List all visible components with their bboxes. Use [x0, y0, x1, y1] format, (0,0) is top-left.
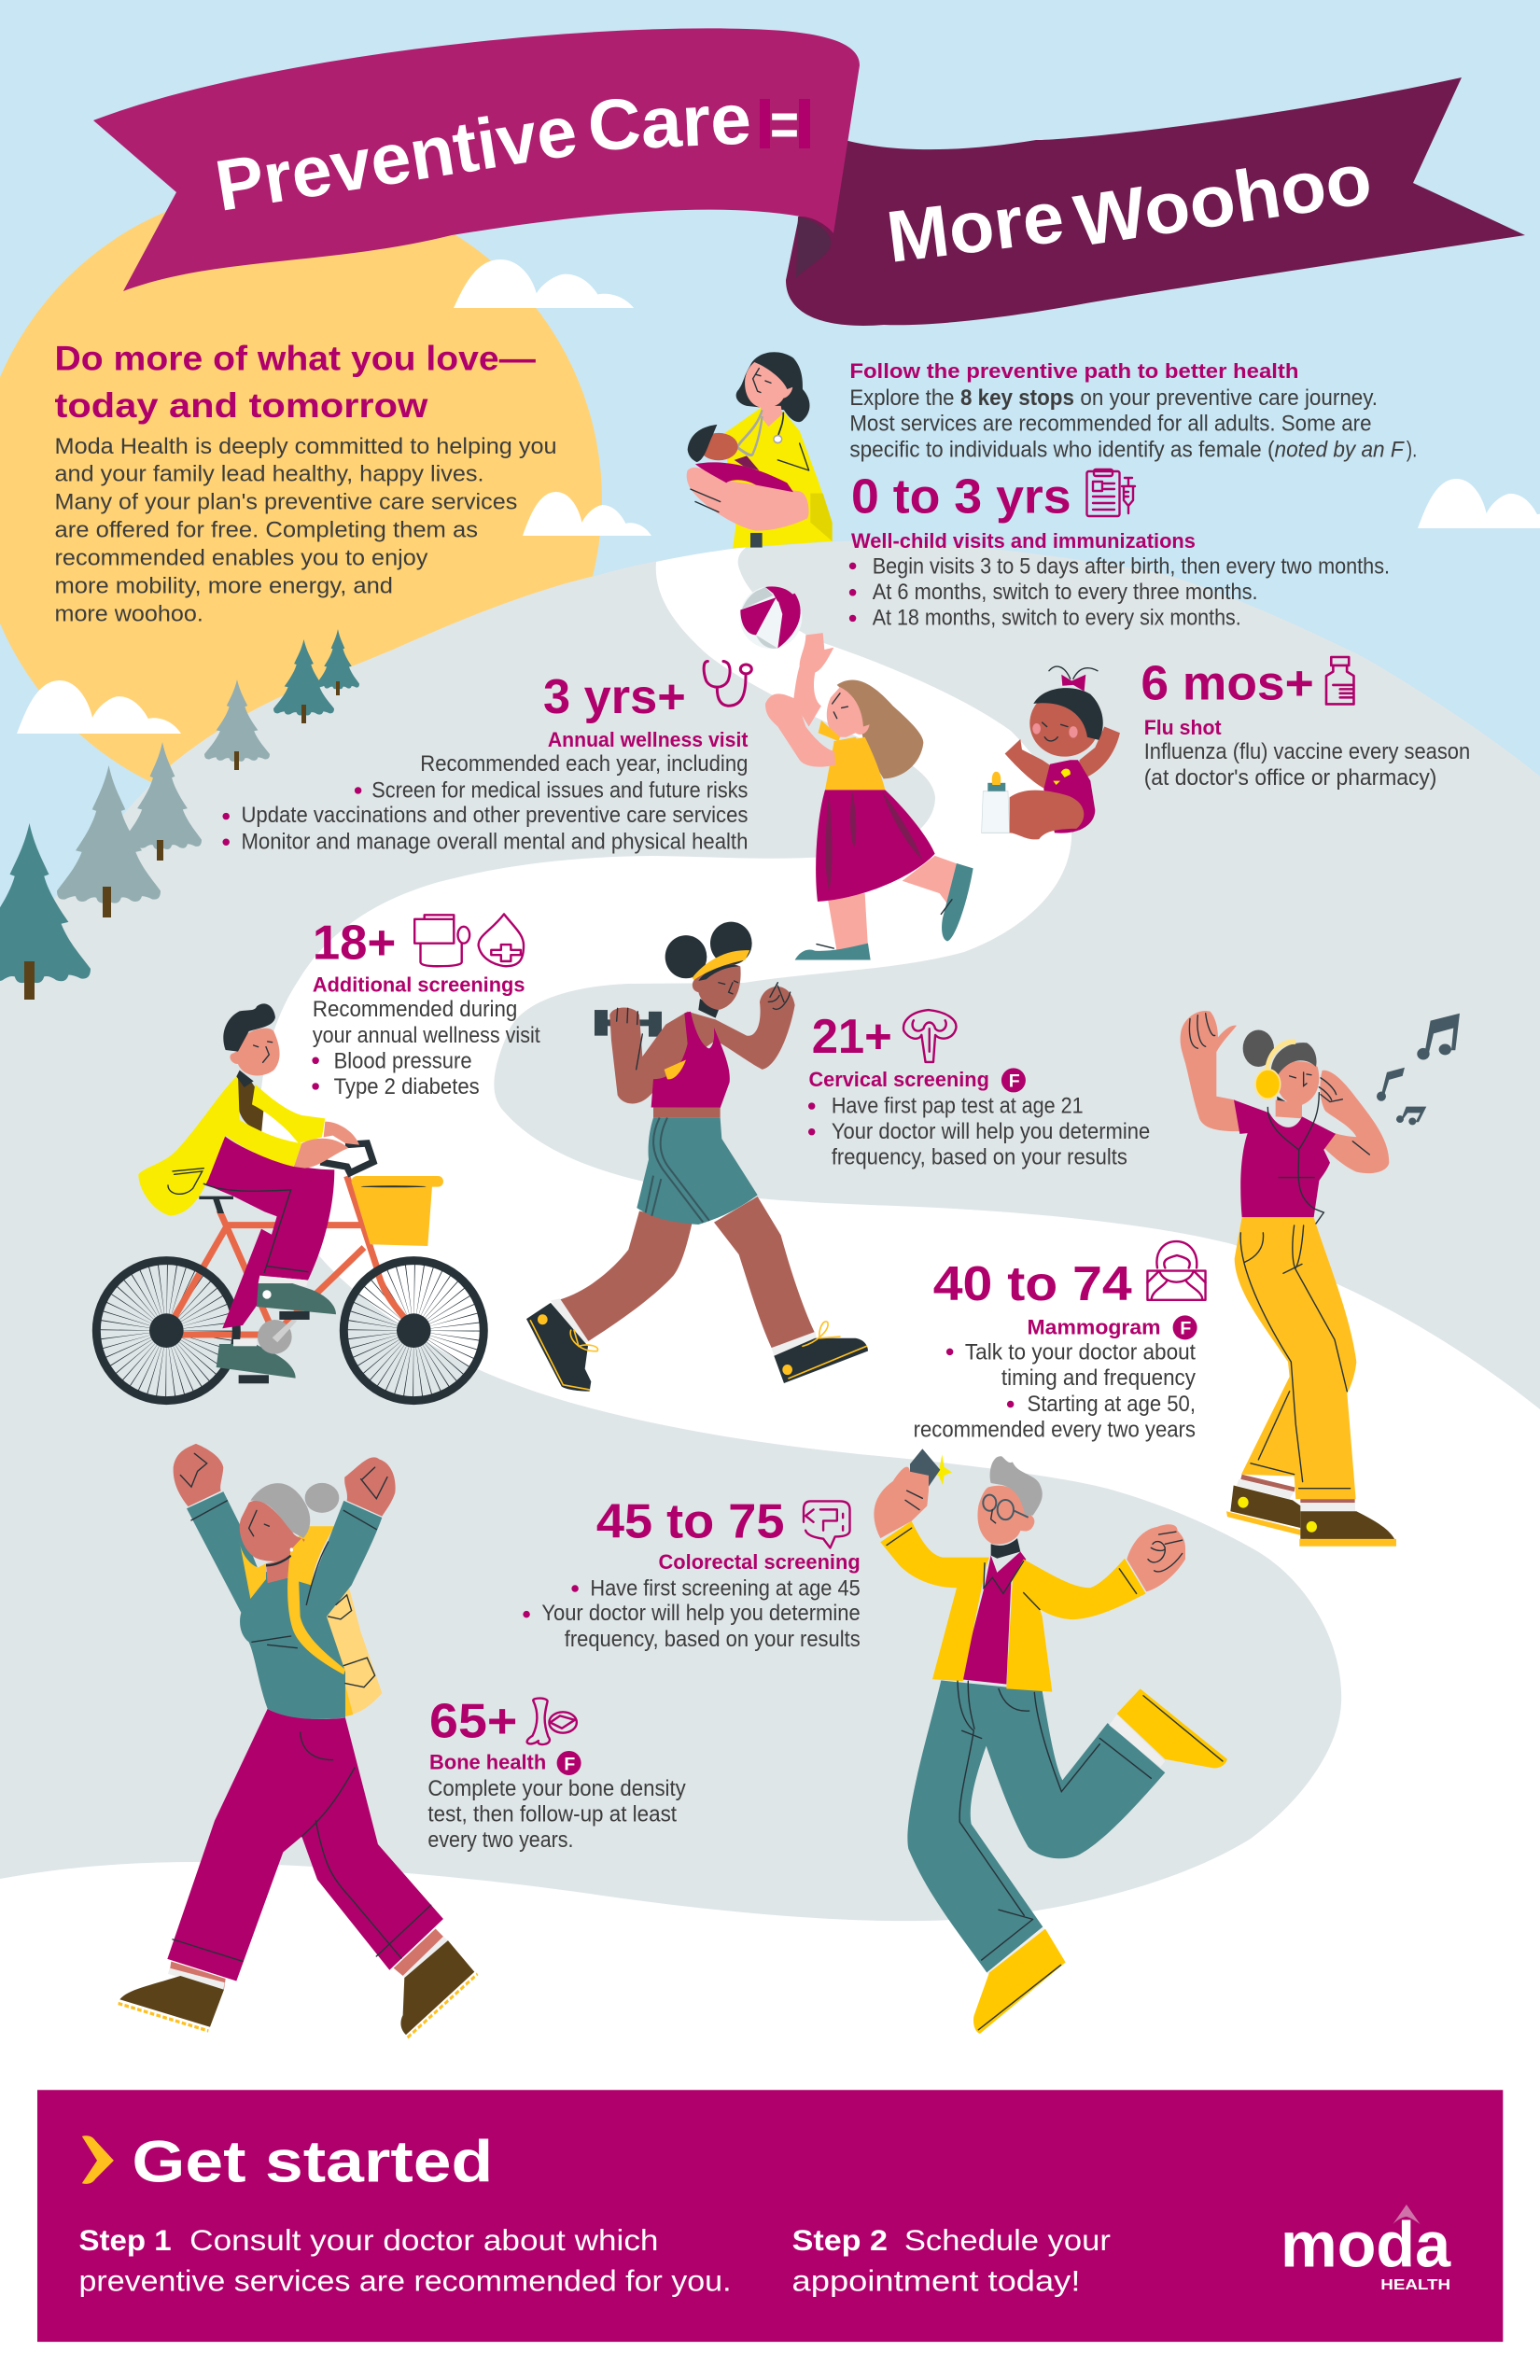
step 1: preventive services are recommended for you.	[79, 2264, 732, 2298]
bike frame	[166, 1176, 411, 1335]
step 1: Step 1	[79, 2223, 172, 2257]
cloud: top	[454, 259, 634, 308]
basket	[352, 1176, 443, 1246]
heading: get started: Get started	[132, 2130, 493, 2195]
heading: More Woohoo: More	[882, 175, 1069, 278]
icon: clipboard and syringe	[1086, 469, 1135, 516]
step 1	[79, 2223, 732, 2298]
illustration: cyclist	[96, 1003, 483, 1401]
intro body: and your family lead healthy, happy lives.	[55, 462, 484, 486]
icon: vaccine vial	[1326, 657, 1353, 704]
illustration: nurse holding baby	[687, 352, 833, 548]
path intro text: Most services are recommended for all adults. Some are	[849, 413, 1372, 437]
stop: 18+: Type 2 diabetes	[334, 1075, 480, 1099]
banner ribbon: right	[786, 77, 1525, 326]
step 2: Step 2	[792, 2223, 888, 2257]
stop: 40 to 74: 40 to 74	[933, 1257, 1132, 1311]
title banner	[93, 28, 1525, 326]
stop: 40 to 74	[914, 1257, 1197, 1442]
stop: 40 to 74: Starting at age 50,	[1028, 1393, 1196, 1417]
intro body	[55, 435, 557, 627]
stop: 21+: 21+	[812, 1010, 892, 1064]
intro heading: today and tomorrow	[55, 385, 428, 425]
stop: 65+	[427, 1694, 686, 1853]
stop: 0 to 3 yrs	[849, 469, 1390, 631]
heading: Preventive Care: Preventive	[210, 91, 582, 227]
stop: 6 mos+: Flu shot	[1144, 716, 1222, 739]
stop: 45 to 75: Have first screening at age 45	[590, 1576, 861, 1601]
path intro text	[849, 359, 1417, 462]
stop: 21+: F	[1009, 1071, 1020, 1092]
stop: 65+: test, then follow-up at least	[427, 1803, 677, 1827]
stop: 3 yrs+: Recommended each year, including	[420, 752, 748, 777]
intro body: Many of your plan's preventive care services	[55, 490, 517, 514]
stop: 3 yrs+: Monitor and manage overall mental and physical health	[241, 831, 748, 855]
illustration: beach ball	[740, 586, 802, 649]
stop: 21+: frequency, based on your results	[832, 1146, 1127, 1170]
stop: 3 yrs+: Update vaccinations and other preventive care services	[241, 804, 748, 828]
stop: 6 mos+: (at doctor's office or pharmacy)	[1144, 766, 1436, 791]
logo: moda health: HEALTH	[1380, 2277, 1450, 2293]
stop: 21+: Cervical screening	[808, 1068, 989, 1091]
stop: 18+	[312, 916, 540, 1099]
stop: 65+: every two years.	[427, 1828, 573, 1853]
hillside land	[0, 541, 1540, 2380]
heading: Preventive Care: Care	[586, 78, 753, 166]
path intro text: Explore the	[849, 386, 955, 411]
icon: mammogram	[1147, 1241, 1206, 1300]
cloud: middle	[523, 492, 651, 536]
stop: 45 to 75: Your doctor will help you determine	[541, 1602, 861, 1626]
stop: 18+: Additional screenings	[313, 973, 525, 996]
stop: 21+: Have first pap test at age 21	[832, 1094, 1084, 1118]
path intro text: noted by an F	[1275, 438, 1405, 462]
stop: 6 mos+: 6 mos+	[1141, 656, 1314, 710]
stop: 40 to 74: F	[1180, 1319, 1191, 1339]
path intro text: ).	[1407, 438, 1417, 462]
stop: 40 to 74: Talk to your doctor about	[965, 1341, 1196, 1365]
path intro text: specific to individuals who identify as female (	[849, 438, 1275, 462]
step 2	[792, 2223, 1111, 2298]
illustration: woman with headphones	[1181, 1011, 1460, 1547]
stop: 3 yrs+: Annual wellness visit	[548, 728, 749, 751]
stop: 21+: Your doctor will help you determine	[832, 1120, 1150, 1144]
stop: 45 to 75: frequency, based on your results	[565, 1628, 861, 1652]
logo: moda health: moda	[1281, 2210, 1451, 2281]
path intro text: on your preventive care journey.	[1080, 386, 1378, 411]
path intro text: 8 key stops	[960, 386, 1074, 411]
intro body: more woohoo.	[55, 603, 203, 627]
stop: 0 to 3 yrs: Begin visits 3 to 5 days after birth, then every two months.	[873, 554, 1390, 579]
step 2: appointment today!	[792, 2264, 1080, 2298]
illustration: older man jumping	[874, 1449, 1227, 2034]
stop: 6 mos+: Influenza (flu) vaccine every season	[1144, 740, 1470, 764]
stop: 3 yrs+	[222, 670, 749, 855]
stop: 45 to 75: Colorectal screening	[659, 1550, 861, 1574]
stop: 18+: Recommended during	[313, 998, 517, 1022]
illustration: older woman walking	[119, 1444, 478, 2037]
stop: 65+: F	[564, 1754, 575, 1774]
sun	[0, 187, 602, 814]
stop: 21+	[808, 1010, 1150, 1170]
banner ribbon: left	[93, 28, 860, 291]
stop: 0 to 3 yrs: At 18 months, switch to every six months.	[873, 607, 1241, 631]
stop: 3 yrs+: 3 yrs+	[543, 670, 686, 724]
icon: stethoscope	[704, 661, 751, 706]
illustration: girl with ball	[765, 633, 973, 960]
icon: bone	[527, 1699, 577, 1744]
heading: More Woohoo: Woohoo	[1070, 136, 1377, 262]
intro body: are offered for free. Completing them as	[55, 518, 478, 542]
illustration: baby sitting	[982, 666, 1120, 839]
music notes	[1377, 1014, 1460, 1125]
icon: blood pressure cuff and droplet	[414, 914, 524, 966]
pine trees	[0, 629, 359, 1000]
stop: 0 to 3 yrs: Well-child visits and immunizations	[851, 529, 1196, 553]
banner fold shadow	[796, 217, 831, 278]
stop: 45 to 75	[523, 1495, 861, 1652]
intro body: more mobility, more energy, and	[55, 575, 393, 599]
intro body: recommended enables you to enjoy	[55, 547, 428, 571]
stop: 65+: Complete your bone density	[427, 1777, 686, 1801]
stop: 18+: 18+	[313, 916, 396, 970]
illustration: woman with dumbbell	[526, 922, 868, 1392]
bike wheels	[123, 1287, 457, 1374]
cloud: right	[1418, 479, 1540, 528]
cloud: left	[17, 680, 181, 734]
stop: 0 to 3 yrs: At 6 months, switch to every three months.	[873, 581, 1258, 605]
stop: 65+: 65+	[429, 1694, 517, 1748]
intro heading	[55, 339, 536, 425]
stop: 0 to 3 yrs: 0 to 3 yrs	[851, 469, 1071, 524]
stop: 3 yrs+: Screen for medical issues and future risks	[371, 778, 748, 803]
step 1: Consult your doctor about which	[189, 2223, 659, 2257]
step 2: Schedule your	[904, 2223, 1111, 2257]
icon: chevron	[82, 2135, 114, 2184]
equals sign: =	[770, 90, 799, 159]
stop: 6 mos+	[1141, 656, 1470, 791]
heading: More Woohoo	[882, 136, 1377, 278]
icon: uterus	[903, 1010, 956, 1062]
stop: 40 to 74: timing and frequency	[1001, 1366, 1196, 1391]
stop: 40 to 74: recommended every two years	[914, 1418, 1196, 1442]
stop: 45 to 75: 45 to 75	[596, 1495, 784, 1549]
intro body: Moda Health is deeply committed to helping you	[55, 435, 557, 459]
path intro text: Follow the preventive path to better health	[849, 359, 1299, 383]
stop: 65+: Bone health	[429, 1750, 546, 1773]
intro heading: Do more of what you love—	[55, 339, 536, 378]
icon: colon	[804, 1501, 849, 1547]
winding white path	[0, 547, 1540, 2380]
heading: Preventive Care	[210, 78, 753, 227]
panel: get started	[37, 2090, 1503, 2342]
stop: 40 to 74: Mammogram	[1028, 1316, 1161, 1339]
stop: 18+: your annual wellness visit	[313, 1024, 540, 1048]
stop: 18+: Blood pressure	[334, 1049, 472, 1073]
